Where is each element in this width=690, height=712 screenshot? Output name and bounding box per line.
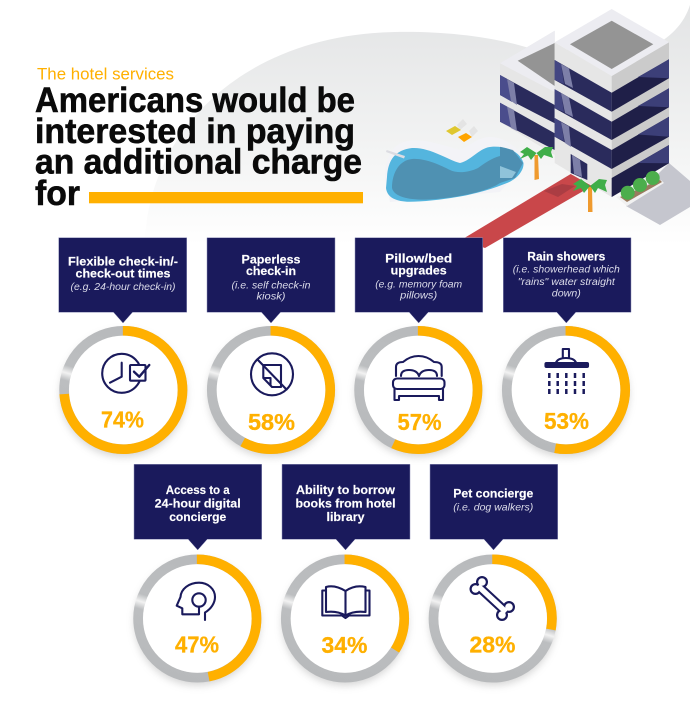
card: paperless check-in	[207, 238, 335, 457]
callout box	[282, 464, 410, 550]
value: 28%	[470, 632, 516, 658]
icon: shower	[546, 349, 588, 397]
callout box: Paperless	[242, 252, 301, 266]
callout box: (i.e. showerhead which	[513, 264, 620, 276]
ground plate	[626, 163, 690, 225]
red carpet	[461, 174, 592, 248]
icon: bed	[393, 356, 444, 400]
title accent bar	[89, 192, 363, 203]
callout box: pillows)	[399, 289, 437, 301]
callout box: (i.e. dog walkers)	[453, 502, 533, 514]
donut 74%	[60, 331, 186, 457]
right tower	[555, 9, 669, 197]
donut 57%	[355, 331, 481, 457]
callout box: Pet concierge	[453, 486, 534, 500]
callout box: check-out times	[76, 267, 171, 281]
callout box: library	[326, 510, 365, 524]
callout box: kiosk)	[256, 290, 286, 302]
value: 58%	[248, 409, 295, 435]
donut 28%	[430, 559, 556, 686]
callout box	[134, 464, 262, 550]
callout box: Pillow/bed	[385, 251, 452, 265]
left tower	[500, 31, 555, 155]
donut 58%	[208, 331, 334, 457]
callout box: books from hotel	[296, 497, 396, 511]
callout box	[430, 464, 558, 550]
callout box: "rains" water straight	[518, 276, 616, 288]
value: 47%	[175, 632, 219, 658]
icon: head	[177, 583, 215, 620]
title: an additional charge	[35, 142, 362, 182]
card: library books	[282, 464, 410, 686]
title	[35, 81, 362, 213]
callout box: upgrades	[391, 263, 447, 277]
callout box: (i.e. self check-in	[232, 279, 311, 291]
value: 57%	[398, 409, 442, 435]
card: rain showers	[503, 238, 631, 457]
donut 34%	[282, 559, 408, 686]
donut 47%	[134, 559, 260, 686]
card: pillow upgrades	[355, 238, 483, 457]
donut 53%	[503, 331, 629, 457]
callout box: Access to a	[166, 483, 230, 497]
callout box: (e.g. 24-hour check-in)	[70, 281, 176, 293]
title: for	[35, 174, 80, 213]
callout box	[503, 238, 631, 323]
callout box	[59, 238, 187, 323]
card: pet concierge	[430, 464, 558, 686]
value: 53%	[544, 408, 589, 434]
callout box	[207, 238, 335, 323]
icon: open book	[322, 586, 370, 618]
title: interested in paying	[35, 112, 355, 151]
subtitle: The hotel services	[37, 66, 174, 84]
planter with bushes	[616, 171, 664, 206]
callout box: Rain showers	[527, 250, 606, 264]
value: 74%	[101, 407, 144, 433]
background blob	[145, 5, 690, 245]
icon: no paper	[251, 353, 293, 395]
callout box: check-in	[246, 264, 296, 278]
callout box: 24-hour digital	[155, 497, 241, 511]
callout box: Flexible check-in/-	[68, 255, 178, 269]
card: flexible check-in	[59, 238, 187, 457]
palm tree left	[520, 147, 553, 180]
callout box	[355, 238, 483, 323]
palm tree right	[573, 179, 607, 212]
callout box: concierge	[169, 510, 226, 524]
card: digital concierge	[134, 464, 262, 686]
callout box: down)	[552, 288, 581, 300]
callout box: (e.g. memory foam	[375, 278, 462, 290]
title: Americans would be	[35, 81, 355, 120]
callout box: Ability to borrow	[296, 483, 396, 497]
illustration: hotel and pool	[385, 9, 690, 248]
icon: bone	[470, 576, 515, 621]
pool	[385, 137, 525, 202]
value: 34%	[322, 632, 368, 658]
icon: clock and checkbox	[102, 354, 149, 393]
sun loungers	[446, 119, 478, 142]
